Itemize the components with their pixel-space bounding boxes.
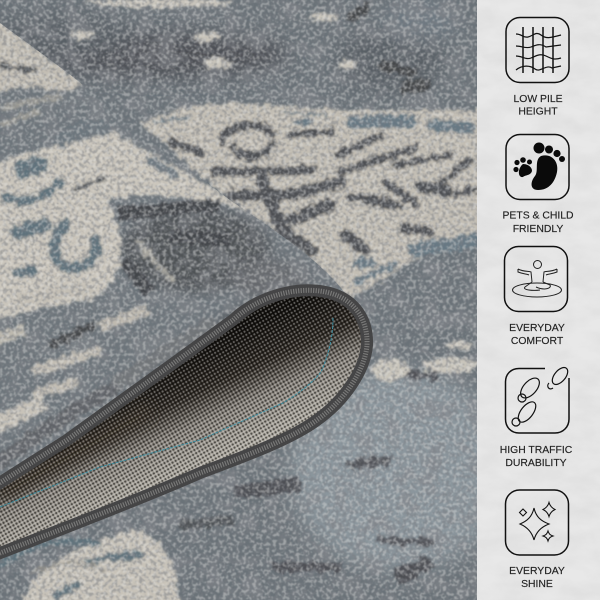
teal stitch line	[0, 317, 333, 507]
feature panel	[477, 0, 600, 600]
rug binding edge	[0, 290, 367, 555]
main cream curl field	[0, 132, 250, 320]
rug backing in fold	[0, 296, 361, 546]
label: PETS & CHILD	[502, 210, 574, 222]
label: EVERYDAY	[509, 566, 565, 577]
feature: everyday comfort	[504, 246, 568, 347]
icon: footsteps	[506, 365, 571, 433]
feature: low pile height	[506, 18, 569, 118]
label: EVERYDAY	[509, 323, 565, 334]
icon: sparkles	[506, 490, 568, 555]
feature: high traffic durability: DURABILITY	[505, 458, 567, 469]
upper cream band	[0, 23, 82, 94]
icon: paw and foot prints	[506, 134, 569, 200]
mottled dark field	[118, 205, 230, 292]
feature: pets and child friendly	[502, 134, 574, 235]
upper and lower floor motifs	[70, 0, 478, 575]
rolled rug top surface	[0, 23, 344, 469]
lower floor cream motif	[0, 530, 179, 600]
floral medallion on floor rug	[140, 103, 490, 298]
feature: everyday comfort: COMFORT	[511, 336, 564, 347]
diagonal cream stripes	[84, 294, 96, 304]
label: LOW PILE	[513, 94, 563, 105]
feature: low pile height: HEIGHT	[518, 106, 558, 118]
icon: meditating figure	[504, 246, 568, 312]
icon: pile fibres	[506, 18, 569, 82]
pile texture over rug	[0, 0, 480, 600]
label: HIGH TRAFFIC	[500, 445, 573, 456]
feature: everyday shine: SHINE	[521, 579, 553, 590]
feature: everyday shine	[506, 490, 568, 590]
feature: high traffic durability	[500, 365, 573, 469]
feature: pets and child friendly: FRIENDLY	[513, 224, 563, 235]
